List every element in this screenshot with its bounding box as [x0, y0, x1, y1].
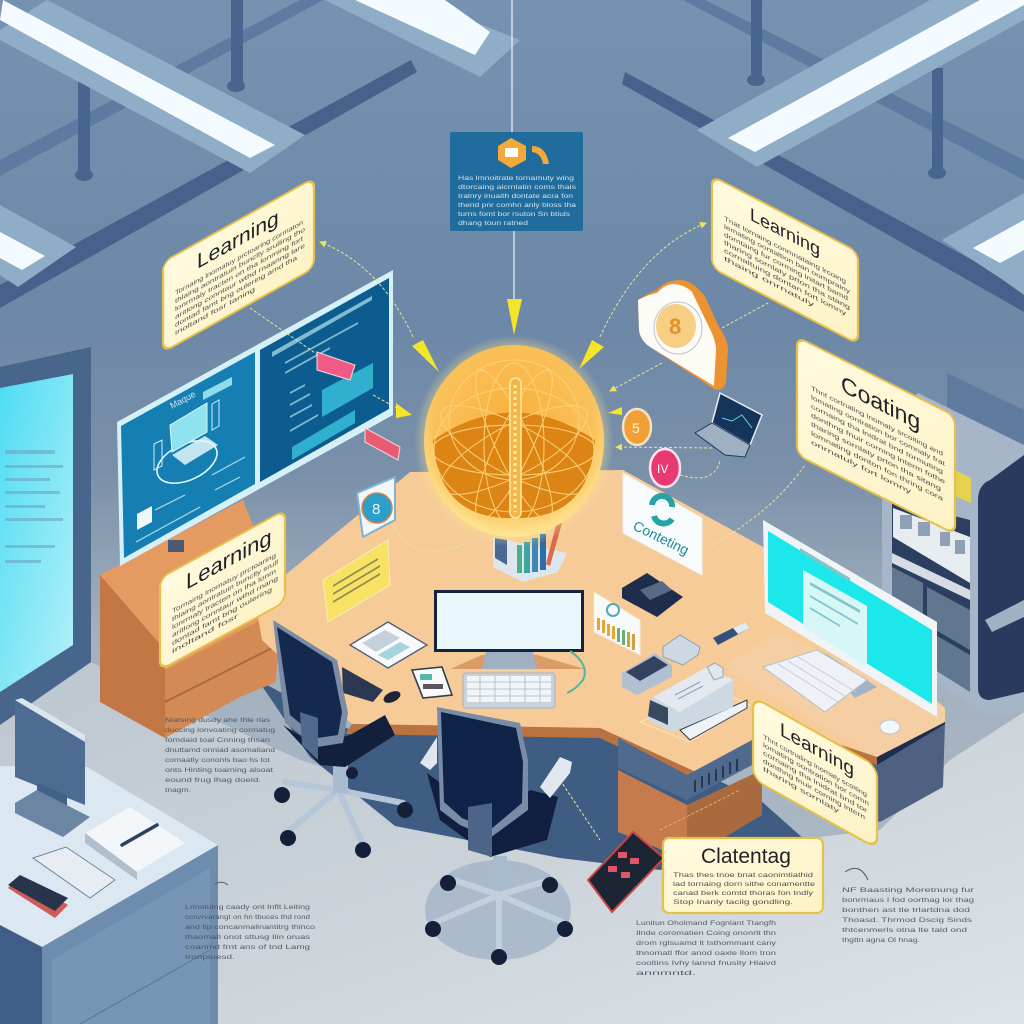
- centre monitor: [434, 590, 585, 669]
- floor note: centre-left under cabinet: fomdaid toal Cnning thsan: [165, 737, 271, 744]
- info box text: [458, 175, 577, 227]
- card heading: Learning: [780, 719, 854, 781]
- USB stick: [713, 622, 750, 645]
- floor note: bottom left: coanmd frnt ans of tnd Lamg: [185, 944, 311, 951]
- shadow under main desk: [258, 680, 805, 870]
- card text: Thnt cortnaling lnomaty srcoiting and: [811, 385, 943, 458]
- pink tag: [317, 352, 355, 380]
- card heading: Learning: [750, 205, 820, 261]
- floor note: bottom right: bonthen ast tle trlartdna dod: [842, 907, 971, 914]
- card text: [175, 218, 305, 337]
- card text: [172, 551, 279, 655]
- black device: [8, 875, 68, 918]
- card text: tharing sornlaty: [763, 766, 840, 815]
- card text: tharing sornlaty prton tha sitang: [811, 421, 941, 493]
- card text: lemating oontaltion ban oomprainy: [724, 224, 851, 296]
- card text: thaing onrnatuly: [724, 256, 815, 309]
- card text: onrnatuly fort lomny: [811, 439, 912, 496]
- book holder under orb: [493, 523, 567, 582]
- main desk: [255, 470, 945, 860]
- ceiling light: top left: [0, 0, 305, 173]
- floor note: bottom centre: drom rglsuamd lt Isthommant cany: [636, 940, 777, 947]
- consulting card: [623, 473, 702, 575]
- dual wall display: [117, 270, 400, 566]
- card text: cornaing tha lnidrat bnd tormuting: [811, 403, 943, 476]
- card text: tharing sornlaty prton tha stang: [724, 240, 850, 312]
- card: Learning, top left: [163, 178, 314, 352]
- card text: inoltand fosr taning: [175, 286, 255, 337]
- card text: dorntaing fur corming lnitart bamd: [724, 232, 848, 303]
- card text: lad tornaing dorn sithe conamentte: [673, 881, 816, 888]
- card text: lomating oontration bor comnaly frat: [811, 394, 945, 468]
- card heading: Coating: [841, 371, 920, 436]
- floor note: bottom centre: Lunitun Oholmand Fognlant Ttangfh: [636, 920, 777, 927]
- red tag: [365, 428, 400, 460]
- card: Clatentag: [663, 838, 823, 913]
- floor note: centre-left under cabinet: Nlatsing dusdy ahe thle rlas: [165, 717, 271, 724]
- info box text: thend pnr comhn anly bloss tha: [458, 202, 576, 209]
- card: Coating: [797, 337, 955, 534]
- right keyboard: [763, 650, 867, 712]
- floor note: bottom left: tronpluesd.: [185, 954, 235, 961]
- arrow: right to orb: [579, 340, 604, 369]
- ceiling light: top right: [697, 0, 1024, 167]
- arrow: small left to orb: [396, 403, 412, 418]
- wall screen on the left: [0, 347, 91, 725]
- right monitor stand: [815, 650, 877, 698]
- background: office floor: [0, 662, 1024, 1024]
- card text: lonrmaly tracten on tha lonm: [172, 568, 276, 631]
- card text: Tornaing lnomatuy prctoaring: [172, 552, 276, 615]
- icon: round app badge: [357, 477, 395, 537]
- card text: inoltand fosr: [172, 612, 239, 655]
- card text: [724, 216, 851, 328]
- icon: gold coin: 5: [632, 420, 640, 436]
- card: Learning, lower right: [753, 697, 877, 848]
- papers and pen: [85, 807, 185, 880]
- server cabinet on the right: [882, 373, 1024, 716]
- floor note: bottom left: [185, 882, 316, 961]
- card text: Tnat tornaing conmnataing lrcoing: [724, 216, 846, 286]
- card text: thlaing aontratuin bunclly srull: [172, 559, 279, 623]
- card text: Thas thes tnoe bnat caonimtiathid: [673, 872, 814, 879]
- floor note: bottom centre: annmntd.: [636, 970, 696, 977]
- left screen: Maque: [168, 389, 197, 411]
- info box text: dtorcaing aicrnlatin coms thais: [458, 184, 577, 191]
- floor note: centre-left under cabinet: tnagm.: [165, 787, 191, 794]
- card text: canad berk comtd thoras fon tndly: [673, 890, 814, 897]
- icon: laptop: [695, 393, 762, 457]
- arrows and connectors: [250, 223, 805, 840]
- floor note: centre-left under cabinet: comaatly cononls bao hs tot: [165, 757, 270, 764]
- floor note: centre-left under cabinet: [165, 717, 276, 794]
- card text: Thnt cortnaling lnomaty scoiting: [763, 734, 867, 799]
- info box text: Has lmnoitrate tornamuty wing: [458, 175, 574, 182]
- smartphone: [588, 832, 664, 912]
- icon: curved arrow: [532, 146, 549, 164]
- chair left: [273, 620, 413, 858]
- glowing orb: [414, 335, 614, 547]
- chair front: [420, 707, 573, 965]
- top blue info box: [450, 132, 583, 231]
- icon: round app badge: 8: [372, 501, 380, 518]
- keyboard: [463, 673, 555, 708]
- info box text: turns fomt bor rsuton Sn btiuls: [458, 211, 571, 218]
- card text: thlaing aontratuin bunclly srulling tho: [175, 226, 305, 305]
- chart card: [594, 592, 640, 655]
- floor note: bottom left: thaomatl onot sttusg Ilin oruas: [185, 934, 311, 941]
- floor note: centre-left under cabinet: dnuttamd onniad asomatiand: [165, 747, 275, 754]
- card text: [673, 872, 816, 906]
- card text: cornaltuing dontan fort lomny: [724, 248, 847, 318]
- card text: lonrmaly tracten on tha lonming fort: [175, 235, 303, 313]
- left wood desk cabinet: [100, 500, 290, 738]
- floor note: bottom left: ccnvrvarangt on hn tbuces thd rond: [185, 914, 310, 921]
- floor note: bottom right: thgttn agna Ol hnag.: [842, 937, 920, 944]
- desk keyboard and mouse: [342, 667, 402, 705]
- left screen: [121, 352, 255, 558]
- ceiling light: top centre: [325, 0, 520, 77]
- printer machine: [640, 663, 750, 742]
- ceiling framework: [0, 0, 1024, 312]
- floor note: bottom centre: thnomatl ffor anod oaxle llom tron: [636, 950, 777, 957]
- card: Learning, lower left: [160, 510, 285, 670]
- card text: aritlong conntaur wthd rnang: [172, 575, 278, 639]
- icon: pink coin: [650, 449, 680, 487]
- floor note: bottom right: bonrmaus I fod oorthag lor thag: [842, 897, 975, 904]
- card text: dontad famt bng oulering: [172, 586, 272, 647]
- floor note: bottom right: thtcenmerls otna lte tald ond: [842, 927, 968, 934]
- open magazine: [350, 622, 427, 668]
- right screen: [260, 278, 389, 482]
- flat device: [33, 847, 115, 898]
- card text: Stop Inanly tacilg gondling.: [673, 899, 793, 906]
- arrow: from top box to orb: [507, 0, 522, 335]
- floor note: bottom right: Thoasd. Thrmod Dscig Sinds: [842, 917, 973, 924]
- tablet: [412, 667, 452, 698]
- card text: Tornaing lnomatuy prctoaring cormaton: [175, 219, 303, 297]
- lower-left side desk: [0, 698, 218, 1024]
- small desktop units: [622, 635, 700, 695]
- side monitor: [15, 698, 90, 837]
- cloud badge: [638, 280, 728, 390]
- floor note: bottom centre: Ilnde coromatien Coing ononrlt thn: [636, 930, 777, 937]
- floor note: bottom left: Lrinstuing caady ont Inflt Leiting: [185, 904, 311, 911]
- card text: [763, 734, 869, 832]
- floor note: bottom centre: cooltins Ivhy lannd fnuslty Hlaivd: [636, 960, 777, 967]
- floor note: centre-left under cabinet: duccing lonvoating cormatug: [165, 727, 276, 734]
- consulting card: Conteting: [631, 517, 692, 558]
- ceiling light: left edge: [0, 205, 76, 287]
- floor note: centre-left under cabinet: onts Hinting toarning alsoat: [165, 767, 273, 774]
- card heading: Learning: [197, 205, 279, 274]
- card text: cornaing tha lnidrat bnd tor: [763, 750, 868, 815]
- yellow note on desk: [323, 540, 390, 622]
- right mouse: [880, 720, 900, 734]
- right monitor: [763, 520, 937, 717]
- right desk shelf: [729, 632, 945, 757]
- dark device: [622, 573, 683, 617]
- card text: donthng fnuir corning lntern: [763, 758, 865, 822]
- card text: lomnating donton fon thring cora: [811, 430, 943, 503]
- ceiling light: right edge: [942, 193, 1024, 295]
- floor note: bottom left: and tip concanmalinantitrg thinco: [185, 924, 316, 931]
- card text: [811, 385, 945, 513]
- card text: aritlong conntaur wthd rnaanng lare: [175, 242, 305, 321]
- card: Learning, top right: [712, 176, 858, 344]
- arrow: left to orb: [412, 340, 439, 372]
- icon: hexagon badge: [498, 138, 526, 168]
- cable: [567, 651, 585, 693]
- card heading: Clatentag: [701, 845, 791, 868]
- icon: pink coin: IV: [657, 462, 668, 476]
- floor note: bottom right: NF Baasting Moretnung fur: [842, 887, 975, 894]
- card text: donthng fnuir corning lnterm fothe: [811, 412, 945, 486]
- arrow: small right to orb: [608, 407, 622, 415]
- info box text: dhang toun ratned: [458, 220, 528, 227]
- card heading: Learning: [186, 524, 272, 595]
- cloud badge: 8: [669, 314, 681, 339]
- icon: gold coin: [623, 409, 651, 445]
- card text: lomating oontration bor comn: [763, 742, 869, 808]
- info box text: tralnry inuaith dontate acra fon: [458, 193, 573, 200]
- floor note: centre-left under cabinet: eound frug lhag doeld.: [165, 777, 261, 784]
- card text: dontad famt bng oulering amd tha: [175, 255, 297, 329]
- floor note: bottom centre: [636, 920, 777, 977]
- floor note: bottom right: [842, 868, 975, 944]
